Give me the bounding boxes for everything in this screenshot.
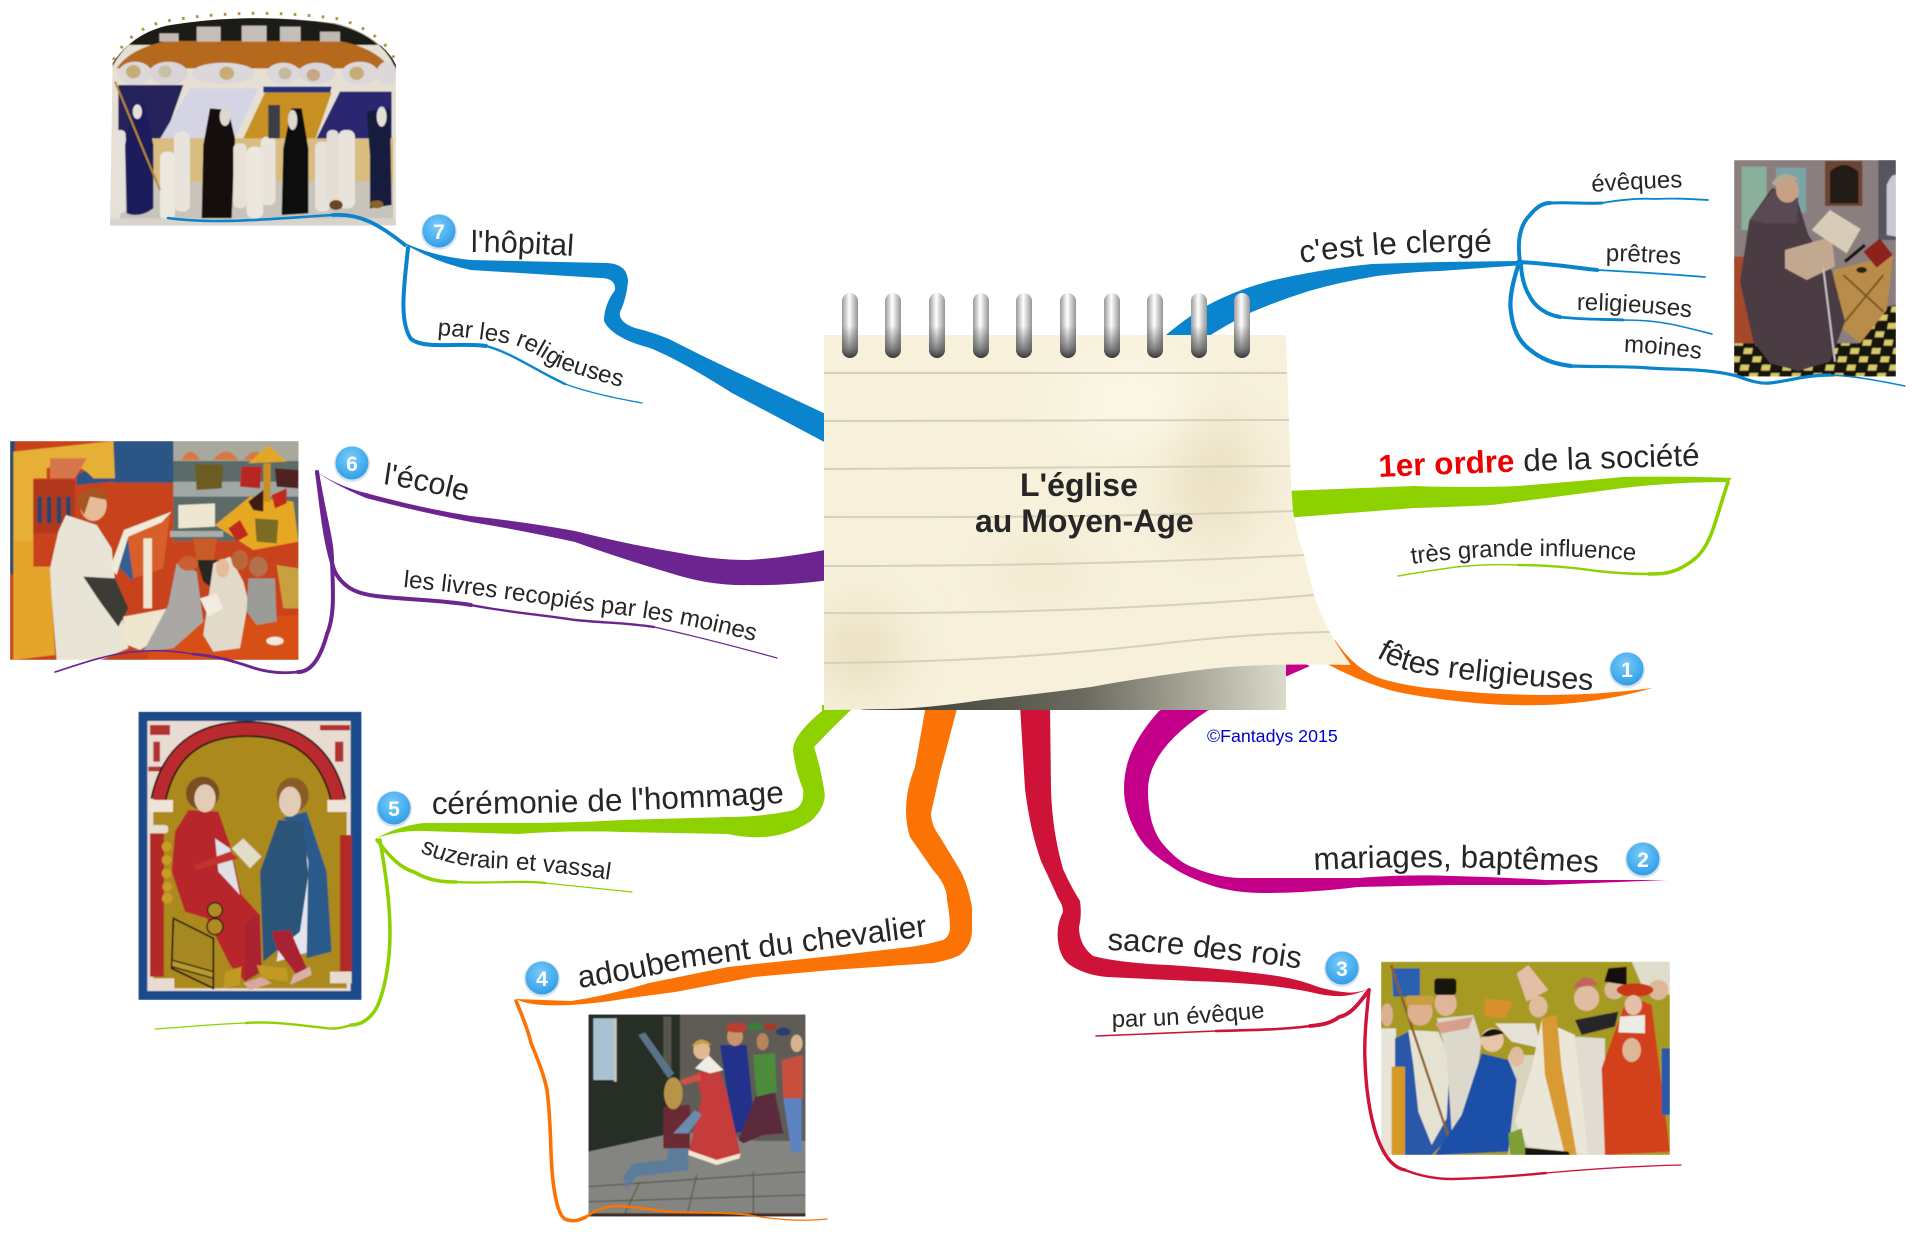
image: monks caring for patients at the hospital xyxy=(110,12,396,226)
label: l'école: l'école xyxy=(384,462,468,500)
label: par les religieuses: par les religieuses xyxy=(438,322,623,386)
title: au Moyen-Age xyxy=(975,503,1194,539)
label: sacre des rois: sacre des rois xyxy=(1108,934,1301,968)
badge 3 xyxy=(1324,951,1360,987)
branch 6: l'école xyxy=(55,472,830,673)
title: L'église xyxy=(1020,467,1138,503)
label: prêtres: prêtres xyxy=(1607,244,1680,266)
label: fêtes religieuses: fêtes religieuses xyxy=(1378,640,1592,690)
notepad: central topic xyxy=(815,293,1351,710)
notepad spiral rings xyxy=(842,293,1250,358)
badge 1: 1 xyxy=(1621,659,1633,682)
label: très grande influence: très grande influence xyxy=(1410,538,1635,564)
label: suzerain et vassal: suzerain et vassal xyxy=(422,842,611,880)
badge 4: 4 xyxy=(536,968,548,991)
label: évêques: évêques xyxy=(1592,172,1682,194)
badge 5: 5 xyxy=(388,798,400,821)
branch 2: mariages, baptêmes xyxy=(1124,650,1667,893)
label: c'est le clergé: c'est le clergé xyxy=(1300,228,1490,262)
badge 6 xyxy=(334,446,370,482)
badge 3: 3 xyxy=(1336,958,1348,981)
branch 7: l'hôpital xyxy=(168,215,830,445)
badge 6: 6 xyxy=(346,453,358,476)
label: 1er ordre de la société: 1er ordre de la société xyxy=(1380,442,1698,477)
notepad under-page shadow xyxy=(860,655,1286,710)
branch 4: adoubement du chevalier xyxy=(516,705,972,1221)
badge 2: 2 xyxy=(1637,849,1649,872)
branch 3: sacre des rois xyxy=(1020,705,1681,1179)
label: mariages, baptêmes: mariages, baptêmes xyxy=(1315,844,1598,875)
label: moines: moines xyxy=(1625,336,1702,359)
image: teacher monk and pupils in a school xyxy=(10,441,299,660)
branch: 1er ordre de la société xyxy=(1285,477,1732,576)
branch: c'est le clergé xyxy=(1160,199,1905,386)
badge 7 xyxy=(421,214,457,250)
image: crowning of the king xyxy=(1381,962,1670,1155)
label: les livres recopiés par les moines: les livres recopiés par les moines xyxy=(404,570,756,640)
branch 5: cérémonie de l'hommage xyxy=(155,705,856,1029)
notepad sheet xyxy=(815,335,1351,710)
image: monk copying manuscripts at his desk xyxy=(1734,160,1896,377)
label: l'hôpital: l'hôpital xyxy=(472,230,573,260)
label: adoubement du chevalier: adoubement du chevalier xyxy=(580,917,926,988)
badge 4 xyxy=(524,961,560,997)
badge 1 xyxy=(1609,652,1645,688)
label: religieuses: religieuses xyxy=(1578,293,1692,318)
label: cérémonie de l'hommage: cérémonie de l'hommage xyxy=(433,786,782,814)
image: feudal homage ceremony xyxy=(138,712,362,1000)
branch 1: fêtes religieuses xyxy=(1320,640,1653,705)
badge 2 xyxy=(1625,842,1661,878)
badge 7: 7 xyxy=(433,221,445,244)
image: dubbing of the knight xyxy=(588,1014,806,1217)
label: par un évêque: par un évêque xyxy=(1113,1004,1264,1032)
badge 5 xyxy=(376,791,412,827)
copyright: ©Fantadys 2015 xyxy=(1207,726,1338,746)
